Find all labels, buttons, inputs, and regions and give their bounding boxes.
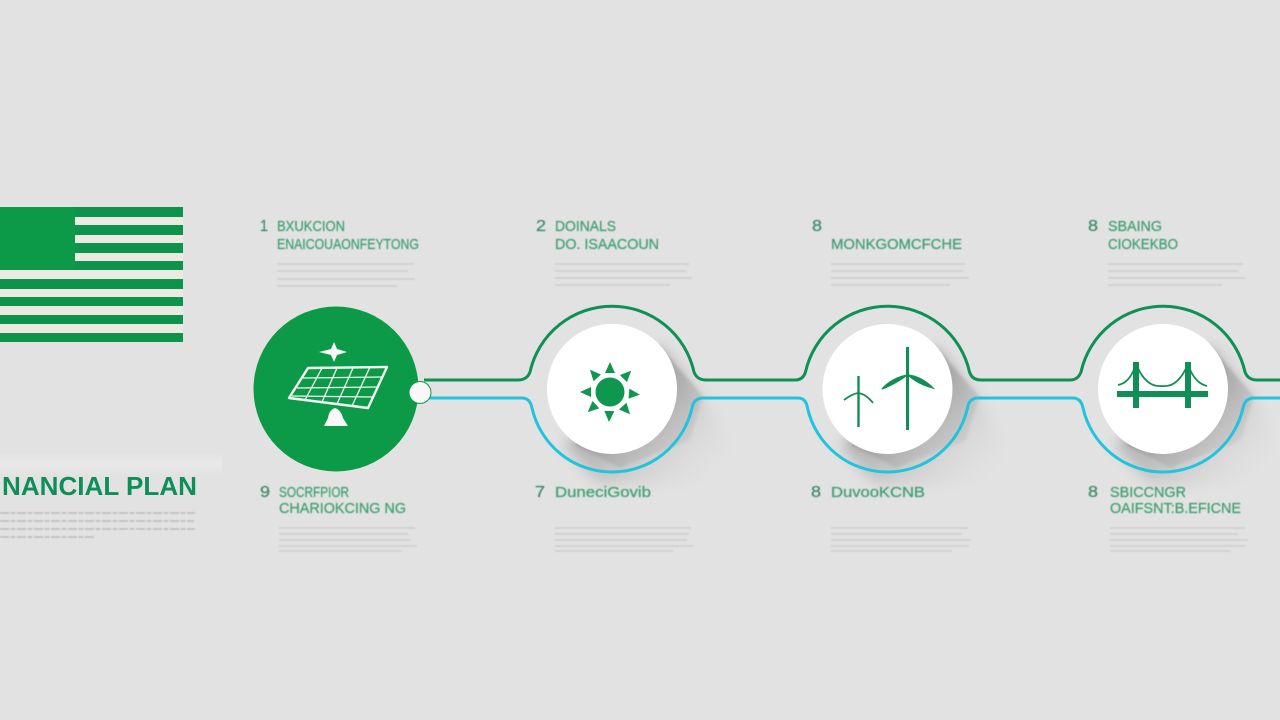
- step 1 circle with solar panel icon: [254, 306, 418, 472]
- step 1 bottom text: SOCRFPIOR: [279, 484, 349, 501]
- step 3 top text: 8: [812, 218, 822, 235]
- step 2 top text: DOINALS: [555, 218, 616, 235]
- step 4 top text: CIOKEKBO: [1108, 236, 1178, 253]
- step 2 top text: [536, 218, 692, 285]
- step 1 bottom text: [260, 484, 417, 551]
- flag icon: [0, 207, 183, 342]
- blue connector line: [424, 398, 1280, 472]
- icon: bridge: [1117, 362, 1208, 408]
- step 1 bottom text: CHARIOKCING NG: [279, 500, 406, 517]
- step 1 top text: BXUKCION: [277, 218, 345, 235]
- step 1 top text: 1: [260, 218, 268, 235]
- step 3 bottom text: 8: [811, 484, 821, 501]
- step 4 top text: SBAING: [1108, 218, 1162, 235]
- step 2 bottom text: DuneciGovib: [555, 484, 651, 501]
- step 2 circle with sun icon: [547, 324, 677, 454]
- step 1 top text: [260, 218, 419, 286]
- step 4 bottom text: SBICCNGR: [1110, 484, 1186, 501]
- connector node: [409, 382, 431, 404]
- step 4 top text: 8: [1088, 218, 1098, 235]
- long shadows: [565, 345, 1280, 485]
- icon: solar panel: [289, 342, 387, 426]
- step 2 bottom text: 7: [535, 484, 545, 501]
- step 3 top text: [812, 218, 969, 285]
- step 4 bottom text: 8: [1088, 484, 1098, 501]
- step 4 circle with bridge icon: [1098, 324, 1228, 454]
- step 2 top text: DO. ISAACOUN: [555, 236, 659, 253]
- title description lines: [0, 513, 195, 537]
- step 1 top text: ENAICOUAONFEYTONG: [277, 236, 419, 253]
- step 2 bottom text: [535, 484, 693, 551]
- step 4 bottom text: OAIFSNT:B.EFICNE: [1110, 500, 1241, 517]
- step 3 bottom text: [811, 484, 971, 551]
- step 2 top text: 2: [536, 218, 546, 235]
- green connector line: [424, 306, 1280, 380]
- soft light band behind title: [0, 452, 222, 476]
- icon: sun: [580, 362, 640, 422]
- step 4 bottom text: [1088, 484, 1248, 551]
- step 3 circle with wind turbines icon: [822, 324, 952, 454]
- step 4 top text: [1088, 218, 1245, 285]
- step 3 top text: MONKGOMCFCHE: [831, 236, 962, 253]
- icon: small wind turbine: [844, 376, 873, 427]
- icon: large wind turbine: [882, 347, 933, 430]
- step 1 bottom text: 9: [260, 484, 270, 501]
- step 3 bottom text: DuvooKCNB: [831, 484, 925, 501]
- title: NANCIAL PLAN: [2, 471, 197, 501]
